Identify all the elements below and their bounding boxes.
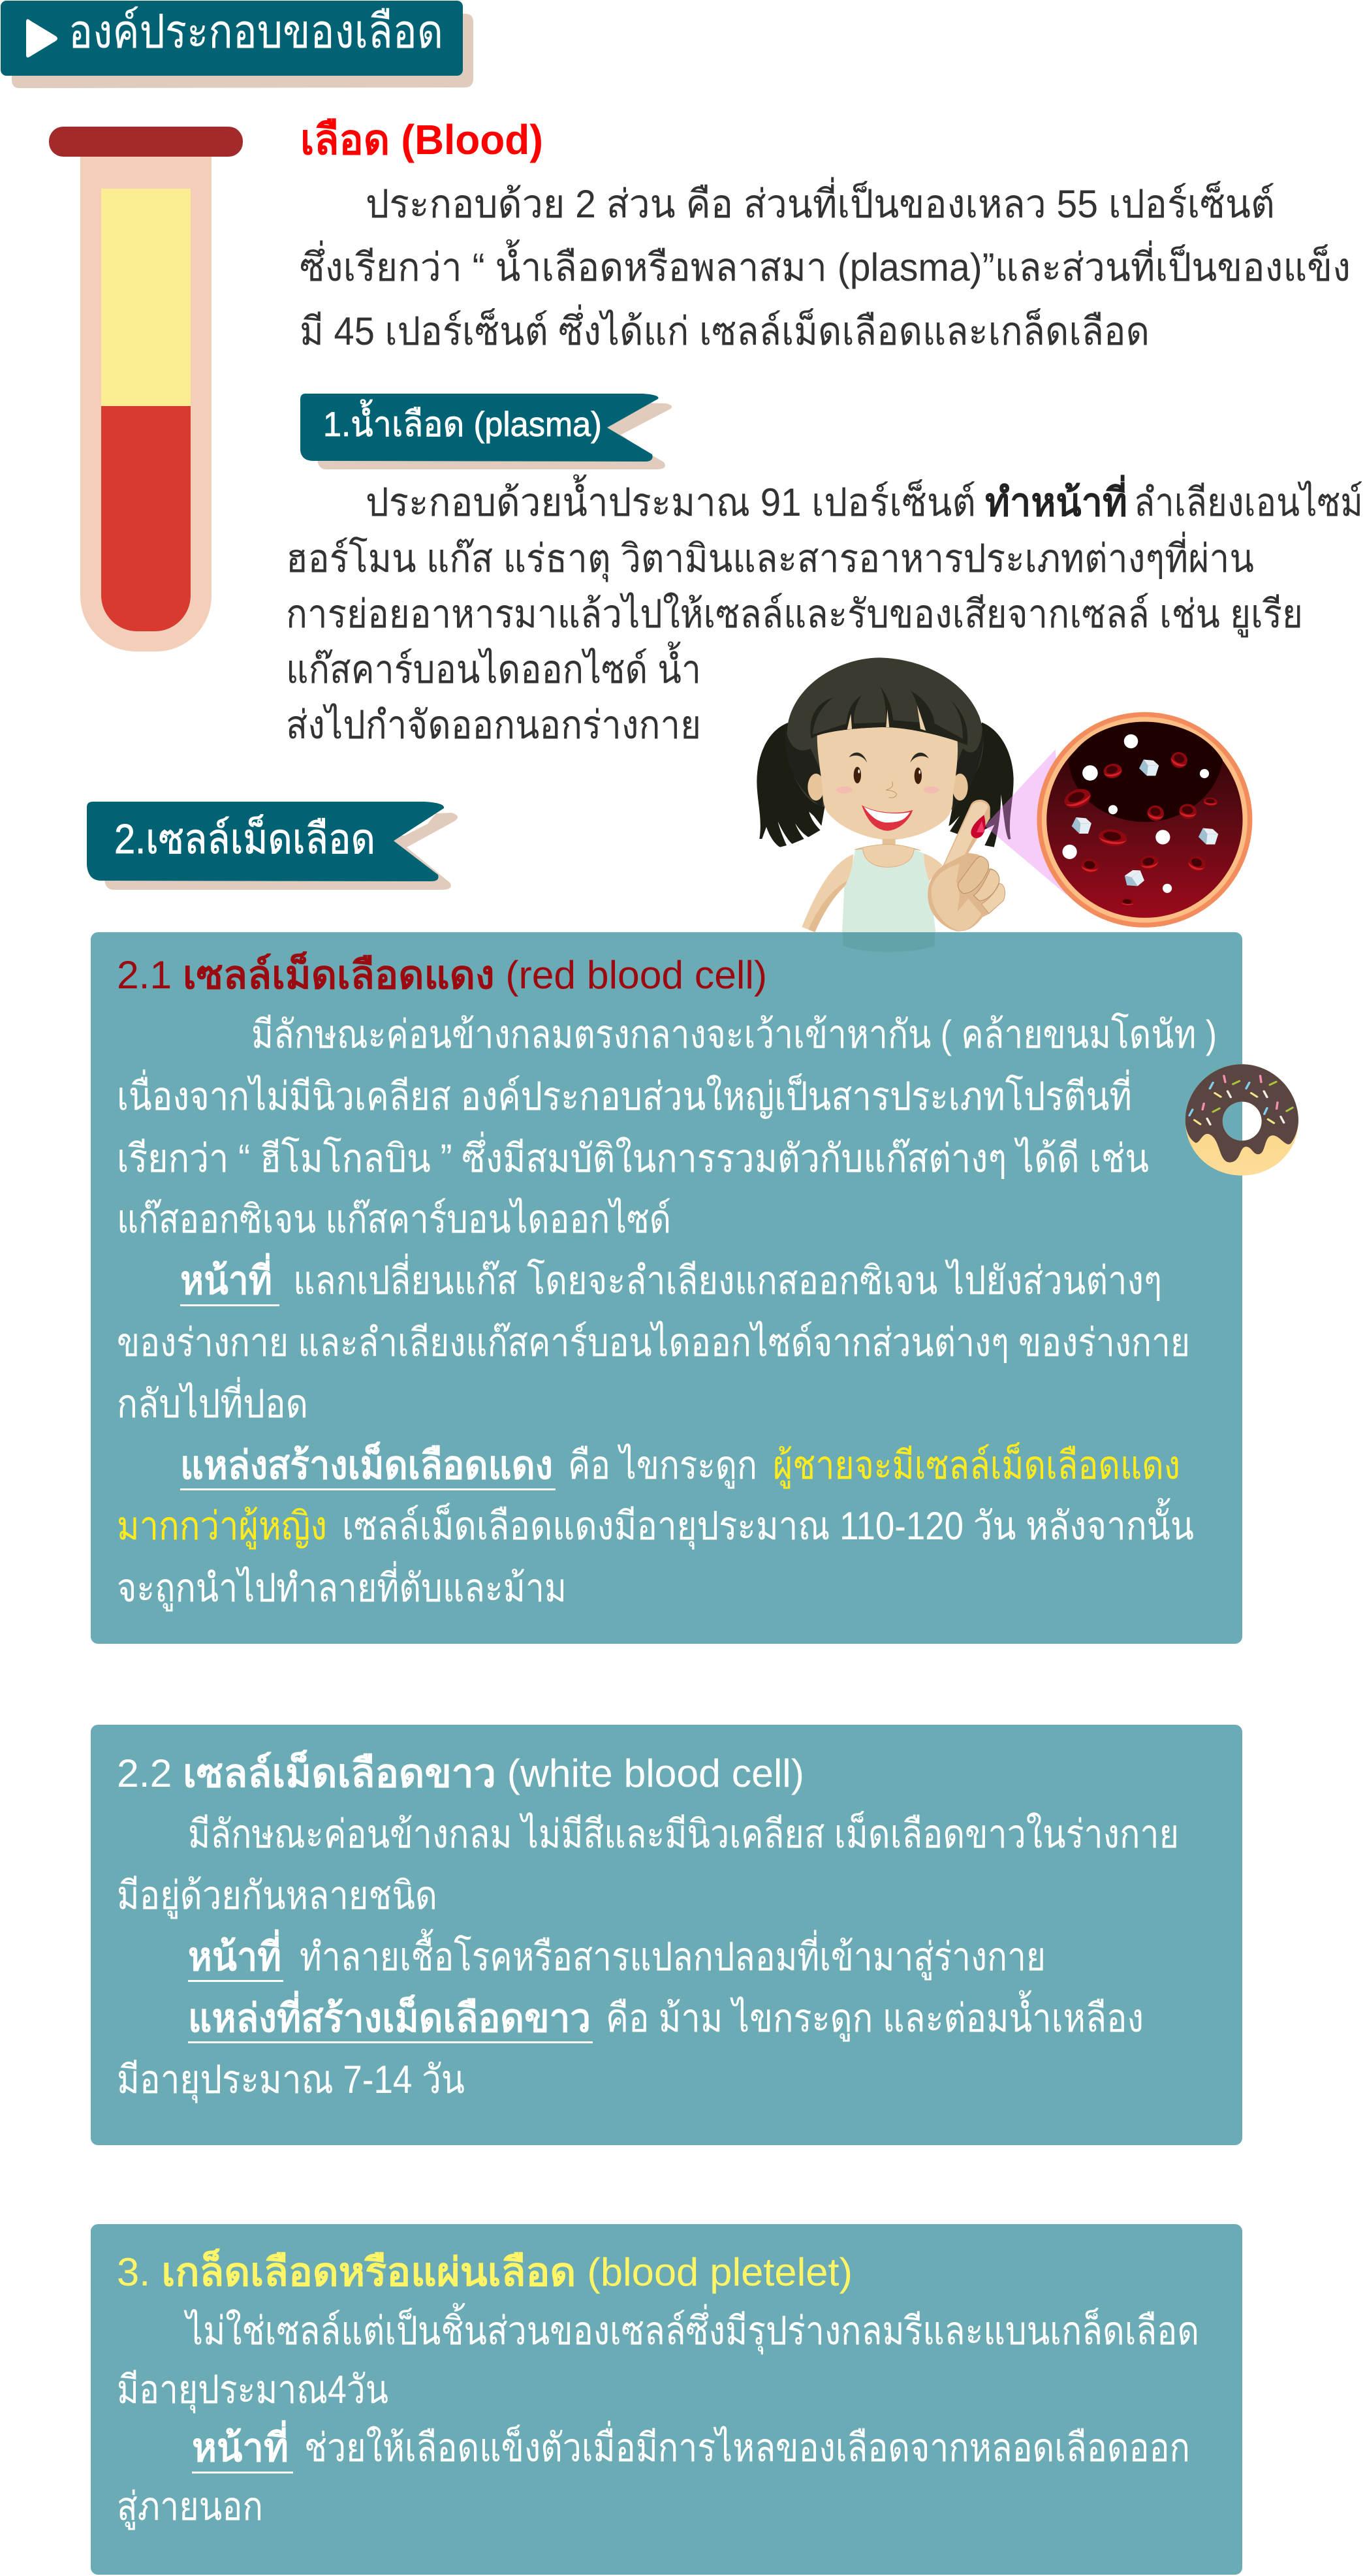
description text: เนื่องจากไม่มีนิวเคลียส องค์ประกอบส่วนใหญ่เป็นสารประเภทโปรตีนที่ xyxy=(117,1069,1132,1119)
heading: blood: เลือด (Blood) xyxy=(300,116,543,163)
plasma paragraph xyxy=(286,474,1363,747)
heading banner: blood components: องค์ประกอบของเลือด xyxy=(69,6,443,58)
function text: ของร่างกาย และลำเลียงแก๊สคาร์บอนไดออกไซด์จากส่วนต่างๆ ของร่างกาย xyxy=(117,1320,1190,1364)
panel: blood platelet xyxy=(91,2224,1242,2575)
description text: ไม่ใช่เซลล์แต่เป็นชิ้นส่วนของเซลล์ซึ่งมีรุปร่างกลมรีและแบนเกล็ดเลือด xyxy=(184,2302,1199,2355)
description text: หน้าที่ xyxy=(192,2420,289,2470)
production site text: จะถูกนำไปทำลายที่ตับและม้าม xyxy=(117,1561,567,1612)
description text: มีอายุประมาณ4วัน xyxy=(117,2368,388,2413)
hair xyxy=(787,657,983,809)
eyes xyxy=(854,767,922,784)
magnifier circle with blood cells xyxy=(1037,712,1252,928)
brows xyxy=(849,753,929,762)
neck xyxy=(883,839,896,845)
dark upper area xyxy=(1069,722,1223,822)
pigtails xyxy=(757,723,1014,847)
description text: ทำลายเชื้อโรคหรือสารแปลกปลอมที่เข้ามาสู่ร่างกาย xyxy=(300,1928,1046,1981)
intro paragraph: ประกอบด้วย 2 ส่วน คือ ส่วนที่เป็นของเหลว 55 เปอร์เซ็นต์ xyxy=(366,177,1275,226)
ears xyxy=(808,774,968,800)
plasma paragraph: ฮอร์โมน แก๊ส แร่ธาตุ วิตามินและสารอาหารประเภทต่างๆที่ผ่าน xyxy=(286,531,1254,582)
sprinkles xyxy=(1189,1076,1293,1125)
function text xyxy=(117,1253,1190,1426)
heading: white blood cell: 2.2 เซลล์เม็ดเลือดขาว (white blood cell) xyxy=(117,1750,804,1795)
face xyxy=(817,727,958,840)
illustration: girl with pricked finger xyxy=(757,657,1067,952)
platelets xyxy=(1072,760,1218,891)
white blood cells xyxy=(1062,734,1209,893)
palm and fingers xyxy=(932,856,1005,931)
plasma paragraph: แก๊สคาร์บอนไดออกไซด์ น้ำ xyxy=(286,641,701,691)
description text: มีลักษณะค่อนข้างกลมตรงกลางจะเว้าเข้าหากัน ( คล้ายขนมโดนัท ) xyxy=(251,1012,1217,1056)
icing xyxy=(1185,1064,1298,1163)
function text: หน้าที่ xyxy=(180,1253,272,1302)
description text: หน้าที่ xyxy=(188,1929,281,1979)
production site text: แหล่งสร้างเม็ดเลือดแดง xyxy=(180,1441,553,1487)
plasma paragraph: ส่งไปกำจัดออกนอกร่างกาย xyxy=(286,702,701,747)
production site text xyxy=(117,1441,1194,1612)
panel: white blood cell xyxy=(91,1725,1242,2145)
blush xyxy=(836,787,939,793)
description text: มีอยู่ด้วยกันหลายชนิด xyxy=(117,1874,437,1919)
mouth xyxy=(862,805,913,831)
arm left xyxy=(802,854,853,932)
ribbon heading: plasma xyxy=(300,394,672,469)
heading: blood platelet: 3. เกล็ดเลือดหรือแผ่นเลือด (blood pletelet) xyxy=(117,2248,853,2294)
description text: มีอายุประมาณ 7-14 วัน xyxy=(117,2058,465,2103)
plasma paragraph: ประกอบด้วยน้ำประมาณ 91 เปอร์เซ็นต์ xyxy=(366,474,976,524)
description text: สู่ภายนอก xyxy=(117,2485,263,2530)
description text: เรียกว่า “ ฮีโมโกลบิน ” ซึ่งมีสมบัติในการรวมตัวกับแก๊สต่างๆ ได้ดี เช่น xyxy=(117,1131,1149,1180)
nose xyxy=(886,782,896,798)
index finger xyxy=(945,802,988,865)
description text: แหล่งที่สร้างเม็ดเลือดขาว xyxy=(188,1990,591,2040)
description text xyxy=(117,1012,1217,1241)
hand xyxy=(928,800,1005,932)
fringe gaps xyxy=(847,705,926,730)
description text: ช่วยให้เลือดแข็งตัวเมื่อมีการไหลของเลือดจากหลอดเลือดออก xyxy=(304,2421,1190,2470)
intro paragraph: มี 45 เปอร์เซ็นต์ ซึ่งได้แก่ เซลล์เม็ดเลือดและเกล็ดเลือด xyxy=(300,304,1150,353)
function text: แลกเปลี่ยนแก๊ส โดยจะลำเลียงแกสออกซิเจน ไปยังส่วนต่างๆ xyxy=(293,1253,1162,1302)
teeth xyxy=(864,807,910,823)
description text xyxy=(117,2302,1199,2530)
shoulder skin xyxy=(855,844,920,867)
production site text: เซลล์เม็ดเลือดแดงมีอายุประมาณ 110-120 วัน หลังจากนั้น xyxy=(342,1498,1194,1550)
ribbon heading: plasma: 1.น้ำเลือด (plasma) xyxy=(323,400,602,444)
plasma paragraph: ทำหน้าที่ xyxy=(985,475,1127,524)
test tube illustration xyxy=(49,127,243,652)
side hair shadow xyxy=(785,727,983,809)
fringe strands xyxy=(810,687,967,746)
red blood cells xyxy=(1061,749,1218,907)
description text: แก๊สออกซิเจน แก๊สคาร์บอนไดออกไซด์ xyxy=(117,1197,671,1241)
magnifying beam xyxy=(984,749,1067,895)
ribbon heading: blood cells xyxy=(87,802,458,890)
function text: กลับไปที่ปอด xyxy=(117,1377,308,1426)
blood drop xyxy=(971,815,985,838)
tank top xyxy=(842,849,935,932)
description text xyxy=(117,1811,1179,2103)
ribbon heading: blood cells: 2.เซลล์เม็ดเลือด xyxy=(114,815,375,862)
heading: red blood cell: 2.1 เซลล์เม็ดเลือดแดง (red blood cell) xyxy=(117,951,767,997)
arm right xyxy=(924,853,942,881)
icon: donut xyxy=(1185,1064,1298,1176)
intro paragraph xyxy=(300,177,1351,353)
description text: คือ ม้าม ไขกระดูก และต่อมน้ำเหลือง xyxy=(606,1990,1144,2042)
production site text: คือ ไขกระดูก xyxy=(568,1443,757,1489)
production site text: ผู้ชายจะมีเซลล์เม็ดเลือดแดง xyxy=(773,1442,1180,1489)
heading banner: blood components xyxy=(1,1,473,88)
production site text: มากกว่าผู้หญิง xyxy=(117,1504,327,1550)
description text: มีลักษณะค่อนข้างกลม ไม่มีสีและมีนิวเคลียส เม็ดเลือดขาวในร่างกาย xyxy=(188,1811,1179,1856)
tank top through panel xyxy=(843,932,935,952)
panel: red blood cell xyxy=(91,932,1242,1644)
